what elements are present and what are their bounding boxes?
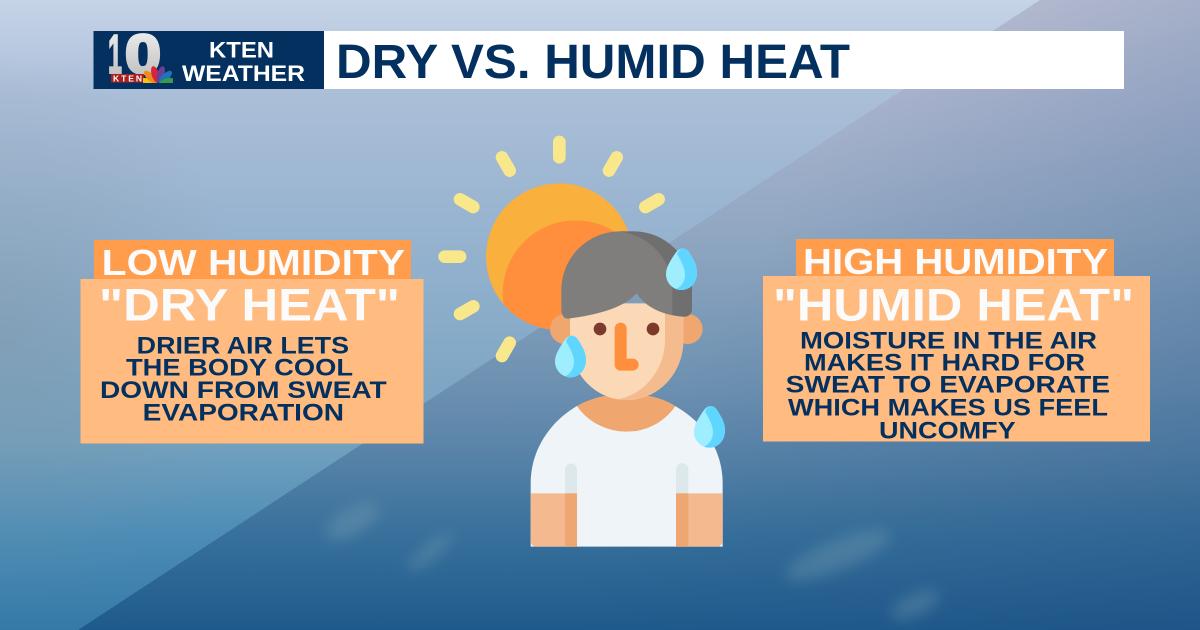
shirt	[531, 406, 723, 547]
text: humid heat explanation: MOISTURE IN THE AIR	[800, 327, 1097, 354]
station logo block: 0	[125, 23, 161, 85]
text: humid heat explanation: UNCOMFY	[879, 417, 1016, 444]
heading: low humidity: LOW HUMIDITY	[102, 242, 405, 283]
station logo block: KTEN	[113, 74, 142, 84]
text: dry heat explanation: THE BODY COOL	[126, 355, 353, 382]
ears	[550, 314, 580, 344]
icon: sweat drop on hair	[666, 248, 697, 290]
neck	[577, 394, 675, 432]
illustration: sweating person and sun	[438, 136, 725, 547]
header bar	[94, 31, 1124, 89]
eyes	[594, 323, 606, 335]
nose	[621, 329, 633, 365]
hair	[561, 231, 692, 319]
arms	[531, 493, 577, 547]
text: humid heat explanation: SWEAT TO EVAPORATE	[786, 372, 1110, 399]
station logo block: WEATHER	[182, 61, 305, 86]
station logo block: KTEN	[209, 37, 274, 62]
icon: sweat drop on cheek	[555, 336, 586, 377]
text: dry heat explanation: DRIER AIR LETS	[137, 332, 349, 359]
header title strip	[324, 31, 1124, 89]
panel: high humidity	[763, 239, 1150, 444]
icon: sweat drop on shoulder	[694, 406, 725, 448]
subheading: humid heat: "HUMID HEAT"	[773, 280, 1134, 331]
text: dry heat explanation	[100, 332, 387, 427]
text: dry heat explanation: EVAPORATION	[143, 400, 344, 427]
station logo block: 1	[108, 23, 122, 85]
card body	[80, 279, 424, 444]
station logo block	[94, 31, 324, 89]
subheading: dry heat: "DRY HEAT"	[99, 280, 400, 331]
text: dry heat explanation: DOWN FROM SWEAT	[100, 377, 387, 404]
card body	[763, 276, 1150, 442]
heading: high humidity: HIGH HUMIDITY	[803, 241, 1108, 282]
text: humid heat explanation	[786, 327, 1110, 444]
panel: low humidity	[80, 240, 424, 444]
face	[570, 303, 683, 400]
header title strip: DRY VS. HUMID HEAT	[336, 36, 850, 89]
text: humid heat explanation: MAKES IT HARD FOR	[804, 350, 1085, 377]
text: humid heat explanation: WHICH MAKES US FEEL	[788, 395, 1108, 422]
icon: sun	[438, 136, 667, 366]
sleeve shadows	[565, 463, 577, 493]
icon: person	[531, 231, 723, 547]
